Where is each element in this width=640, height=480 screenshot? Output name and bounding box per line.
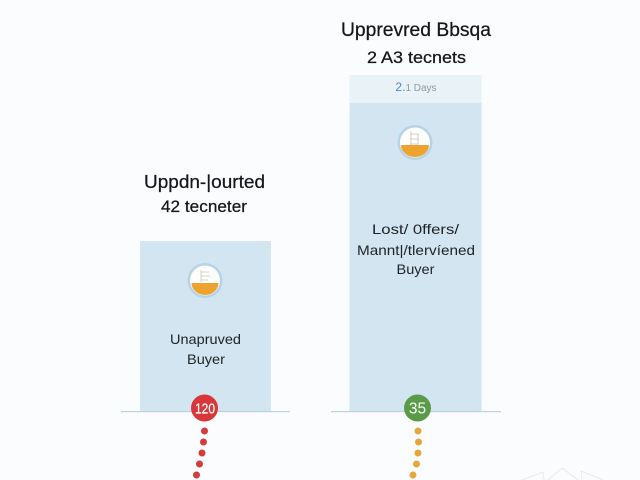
left column heading [144, 171, 265, 216]
right bar top segment [350, 75, 482, 103]
icon: left bar document and bowl [188, 263, 222, 298]
right baseline [331, 411, 501, 412]
left bar label [170, 331, 241, 367]
left baseline [121, 411, 290, 412]
right column heading [341, 20, 491, 67]
right bar label: Mannt|/tlervíened [357, 242, 475, 258]
right badge: 35: 35 [409, 400, 426, 418]
left bar [140, 241, 271, 411]
right column heading: Upprevred Bbsqa [341, 20, 491, 41]
right bar top segment: 2.1 Days [395, 80, 437, 94]
right column heading: 2 A3 tecnets [367, 49, 466, 67]
right dotted trail [410, 428, 422, 478]
icon: right bar document and bowl [398, 125, 432, 160]
right bar label [357, 221, 475, 277]
right bar label: Buyer [396, 261, 435, 277]
right bar label: Lost/ 0ffers/ [372, 221, 459, 237]
left column heading: Uppdn-|ourted [144, 171, 265, 192]
right badge: 35 [404, 394, 431, 422]
left dotted trail [193, 428, 208, 478]
left bar label: Unapruved [170, 331, 241, 347]
corner watermark outline [522, 468, 603, 480]
left badge: 120: 120 [195, 400, 215, 418]
right bar [350, 103, 482, 411]
left column heading: 42 tecneter [161, 198, 248, 216]
left badge: 120 [191, 394, 218, 422]
left bar label: Buyer [187, 351, 225, 367]
